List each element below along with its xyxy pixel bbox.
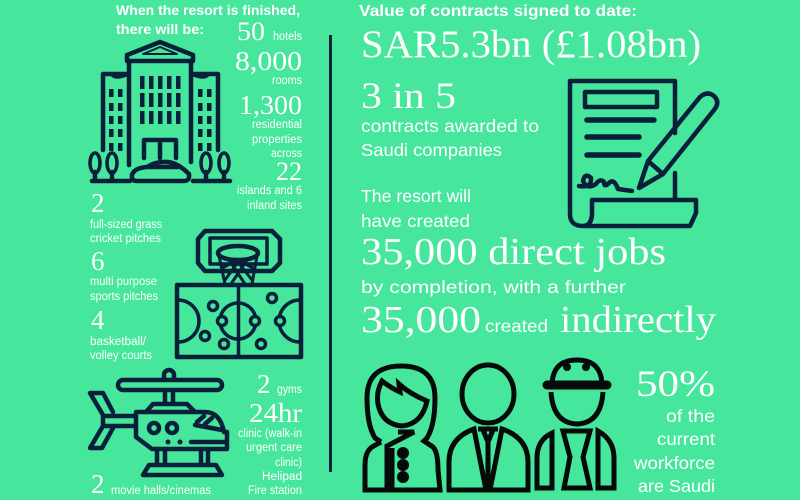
text block: hotels, rooms and properties: across <box>271 148 302 160</box>
text block: sports facilities: 4 <box>91 305 105 335</box>
text block: 50 percent of workforce: workforce <box>633 453 715 473</box>
text block: sports facilities: sports pitches <box>90 291 158 303</box>
text block: resort jobs: The resort will <box>361 186 471 206</box>
text block: 50 percent of workforce <box>633 364 715 496</box>
text block: resort jobs: have created <box>361 211 470 231</box>
icon: signed contract <box>570 81 717 226</box>
text block: gyms, clinic, helipad: urgent care <box>246 442 302 454</box>
text block: 3 in 5 contracts: contracts awarded to <box>361 116 539 136</box>
text block: hotels, rooms and properties: islands and 6 <box>237 185 302 197</box>
text block: hotels, rooms and properties: 50 <box>237 17 265 46</box>
text block: hotels, rooms and properties: 22 <box>276 157 302 186</box>
heading: value of contracts: Value of contracts signed to date: <box>359 3 637 20</box>
text block: 3 in 5 contracts <box>361 76 539 160</box>
text block: resort jobs: created <box>485 316 548 336</box>
text block: 50 percent of workforce: 50% <box>636 364 715 405</box>
text block: sports facilities: volley courts <box>90 350 152 362</box>
text block: 3 in 5 contracts: 3 in 5 <box>361 76 456 117</box>
text block: gyms, clinic, helipad: 24hr <box>249 398 302 428</box>
heading: when the resort is finished: there will be: <box>116 21 204 37</box>
text block: movie halls <box>91 469 211 499</box>
text block: hotels, rooms and properties: 8,000 <box>235 46 302 76</box>
text block: gyms, clinic, helipad: clinic) <box>275 457 302 469</box>
text block: sports facilities: cricket pitches <box>90 233 161 245</box>
worker <box>537 360 614 488</box>
text block: sports facilities: basketball/ <box>90 336 147 348</box>
text block: 50 percent of workforce: of the <box>666 406 715 426</box>
text block: resort jobs: 35,000 <box>361 299 481 341</box>
heading: when the resort is finished: When the resort is finished, <box>116 2 300 18</box>
woman <box>365 366 440 490</box>
text block: 50 percent of workforce: current <box>657 429 715 449</box>
text block: sports facilities: multi purpose <box>90 276 157 288</box>
icon: three workers <box>365 360 614 490</box>
text block: hotels, rooms and properties: 1,300 <box>239 90 302 120</box>
text block: gyms, clinic, helipad: clinic (walk-in <box>238 428 302 440</box>
text block: 50 percent of workforce: are Saudi <box>638 476 715 496</box>
icon: hotel <box>90 42 230 181</box>
big figure: contract value: SAR5.3bn (£1.08bn) <box>361 23 701 66</box>
text block: sports facilities: 2 <box>91 188 104 218</box>
heading: when the resort is finished <box>116 2 300 37</box>
text block: gyms, clinic, helipad: Helipad <box>262 471 302 483</box>
text block: gyms, clinic, helipad: Fire station <box>248 485 302 497</box>
icon: basketball court <box>177 231 301 357</box>
text block: hotels, rooms and properties: hotels <box>273 31 302 43</box>
man <box>449 365 528 490</box>
text block: resort jobs: indirectly <box>560 299 716 341</box>
text block: gyms, clinic, helipad: gyms <box>277 384 302 396</box>
icon: helicopter <box>90 370 227 475</box>
text block: resort jobs: 35,000 direct jobs <box>361 231 666 273</box>
text block: hotels, rooms and properties: inland sites <box>247 200 302 212</box>
text block: gyms, clinic, helipad: 2 <box>257 369 270 399</box>
text block: movie halls: 2 <box>91 469 104 499</box>
text block: gyms, clinic, helipad <box>238 369 302 497</box>
text block: sports facilities <box>90 188 162 362</box>
text block: sports facilities: full-sized grass <box>90 219 162 231</box>
text block: hotels, rooms and properties: properties <box>252 134 302 146</box>
text block: movie halls: movie halls/cinemas <box>111 485 211 497</box>
text block: hotels, rooms and properties: rooms <box>272 75 302 87</box>
text block: resort jobs: by completion, with a further <box>361 277 626 297</box>
text block: sports facilities: 6 <box>91 246 104 276</box>
text block: hotels, rooms and properties: residential <box>252 119 302 131</box>
text block: hotels, rooms and properties <box>235 17 302 212</box>
text block: resort jobs <box>361 186 716 341</box>
text block: 3 in 5 contracts: Saudi companies <box>361 140 502 160</box>
